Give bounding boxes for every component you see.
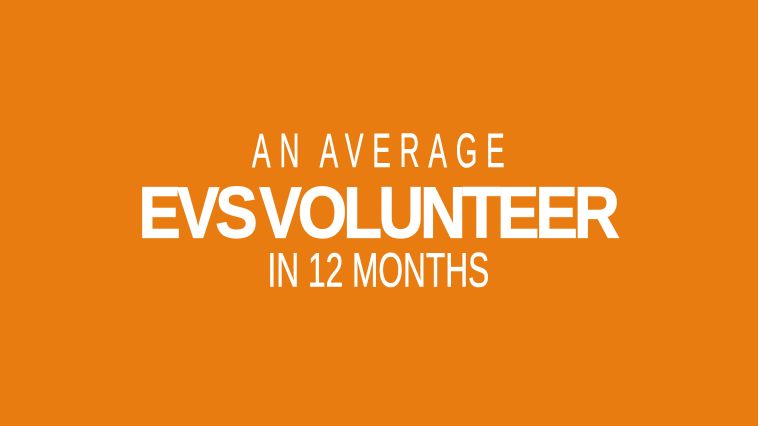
heading line: IN 12 MONTHS: IN 12 MONTHS	[268, 243, 489, 297]
heading line: EVS VOLUNTEER: EVS VOLUNTEER	[138, 174, 619, 253]
heading line: AN AVERAGE: AN AVERAGE	[252, 124, 513, 178]
